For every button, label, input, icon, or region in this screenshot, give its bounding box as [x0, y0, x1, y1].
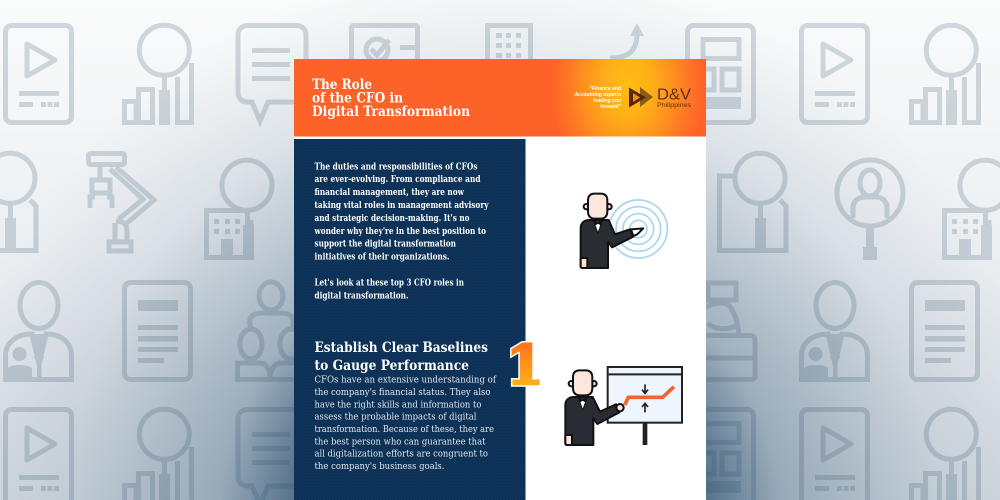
target rings [609, 200, 667, 258]
infographic page [294, 59, 706, 500]
icon: document row 3 right [912, 282, 978, 380]
panel: white page sheet [294, 59, 706, 500]
intro paragraph: wonder why they're in the best position to [314, 227, 486, 237]
section body text: have the right skills and information to [314, 399, 482, 410]
icon: executive row 3 [6, 282, 72, 382]
section body text: CFOs have an extensive understanding of [314, 375, 497, 386]
icon: growth arrow [610, 23, 644, 58]
tagline: "Finance and [589, 86, 622, 92]
number 1 badge: 1 [506, 333, 544, 397]
presenter figure [565, 370, 624, 445]
logo: D&V Philippines: D&V [657, 86, 691, 104]
section body text: the company's business goals. [314, 461, 444, 472]
tagline: leading you [593, 98, 621, 104]
section body text: transformation. Because of these, they are [314, 424, 494, 435]
intro paragraph: and strategic decision-making. It's no [314, 214, 470, 224]
icon: meeting group [238, 282, 306, 380]
tagline: Accounting experts [573, 92, 621, 98]
title [312, 77, 470, 120]
intro paragraph: are ever-evolving. From compliance and [314, 175, 481, 185]
section body text [314, 375, 497, 472]
intro paragraph: initiatives of their organizations. [314, 253, 450, 263]
section body text: the company's financial status. They also [314, 387, 491, 398]
section heading: Establish Clear Baselines [314, 340, 488, 356]
intro paragraph: taking vital roles in management advisory [314, 201, 489, 211]
chart board [608, 367, 682, 445]
illustration: CFO presenting chart [565, 367, 682, 445]
logo: D&V Philippines: Philippines [657, 102, 692, 109]
icon: stamp on pad [706, 283, 755, 380]
icon: layout panel row 1 [688, 26, 754, 122]
intro paragraph: support the digital transformation [314, 240, 456, 250]
CFO figure [581, 194, 643, 268]
icon: magnifier document right [720, 153, 786, 253]
icon: video document row 1 right [802, 26, 868, 122]
number 1 badge: 1 [506, 333, 544, 397]
panel: navy text column [294, 139, 526, 500]
intro paragraph: financial management, they are now [314, 188, 464, 198]
intro paragraph: digital transformation. [314, 292, 408, 302]
icon: person in lens [837, 160, 903, 260]
illustration: CFO with target [581, 194, 667, 268]
icon: building magnifier left [206, 160, 272, 260]
logo: D&V Philippines [629, 86, 692, 109]
icon: executive row 3 right [802, 282, 868, 382]
section body text: all digitalization efforts are congruent to [314, 449, 488, 460]
intro paragraph: The duties and responsibilities of CFOs [314, 162, 478, 172]
icon: video document row 4 right [802, 410, 868, 500]
title: of the CFO in [312, 90, 403, 106]
panel: orange header [294, 59, 706, 136]
icon: checklist card [352, 26, 418, 122]
section body text: the best person who can guarantee that [314, 436, 486, 447]
icon: speech bubble row 1 [238, 26, 306, 121]
intro paragraph [314, 162, 489, 302]
icon: magnifier chart row 1 [124, 25, 192, 125]
icon: video document row 4 [6, 410, 72, 500]
title: The Role [312, 77, 372, 93]
icon: office building [488, 26, 530, 122]
intro paragraph: Let's look at these top 3 CFO roles in [314, 279, 464, 289]
icon: magnifier chart row 1 right [912, 25, 978, 125]
icon: speech bubble row 4 [238, 410, 306, 500]
icon: document row 3 [124, 282, 190, 380]
title: Digital Transformation [312, 104, 470, 120]
icon: magnifier chart row 4 [124, 409, 192, 500]
icon: magnifier document left [0, 153, 36, 253]
section body text: assess the probable impacts of digital [314, 412, 476, 423]
section heading [314, 340, 488, 374]
icon: robot arm [88, 154, 154, 251]
icon: layout panel row 4 [688, 410, 754, 500]
section heading: to Gauge Performance [314, 358, 469, 374]
tagline: forward" [600, 104, 622, 110]
icon: building magnifier right [944, 160, 1000, 260]
icon: magnifier chart row 4 right [912, 409, 978, 500]
tagline [573, 86, 622, 110]
icon: video document row 1 [6, 26, 72, 122]
